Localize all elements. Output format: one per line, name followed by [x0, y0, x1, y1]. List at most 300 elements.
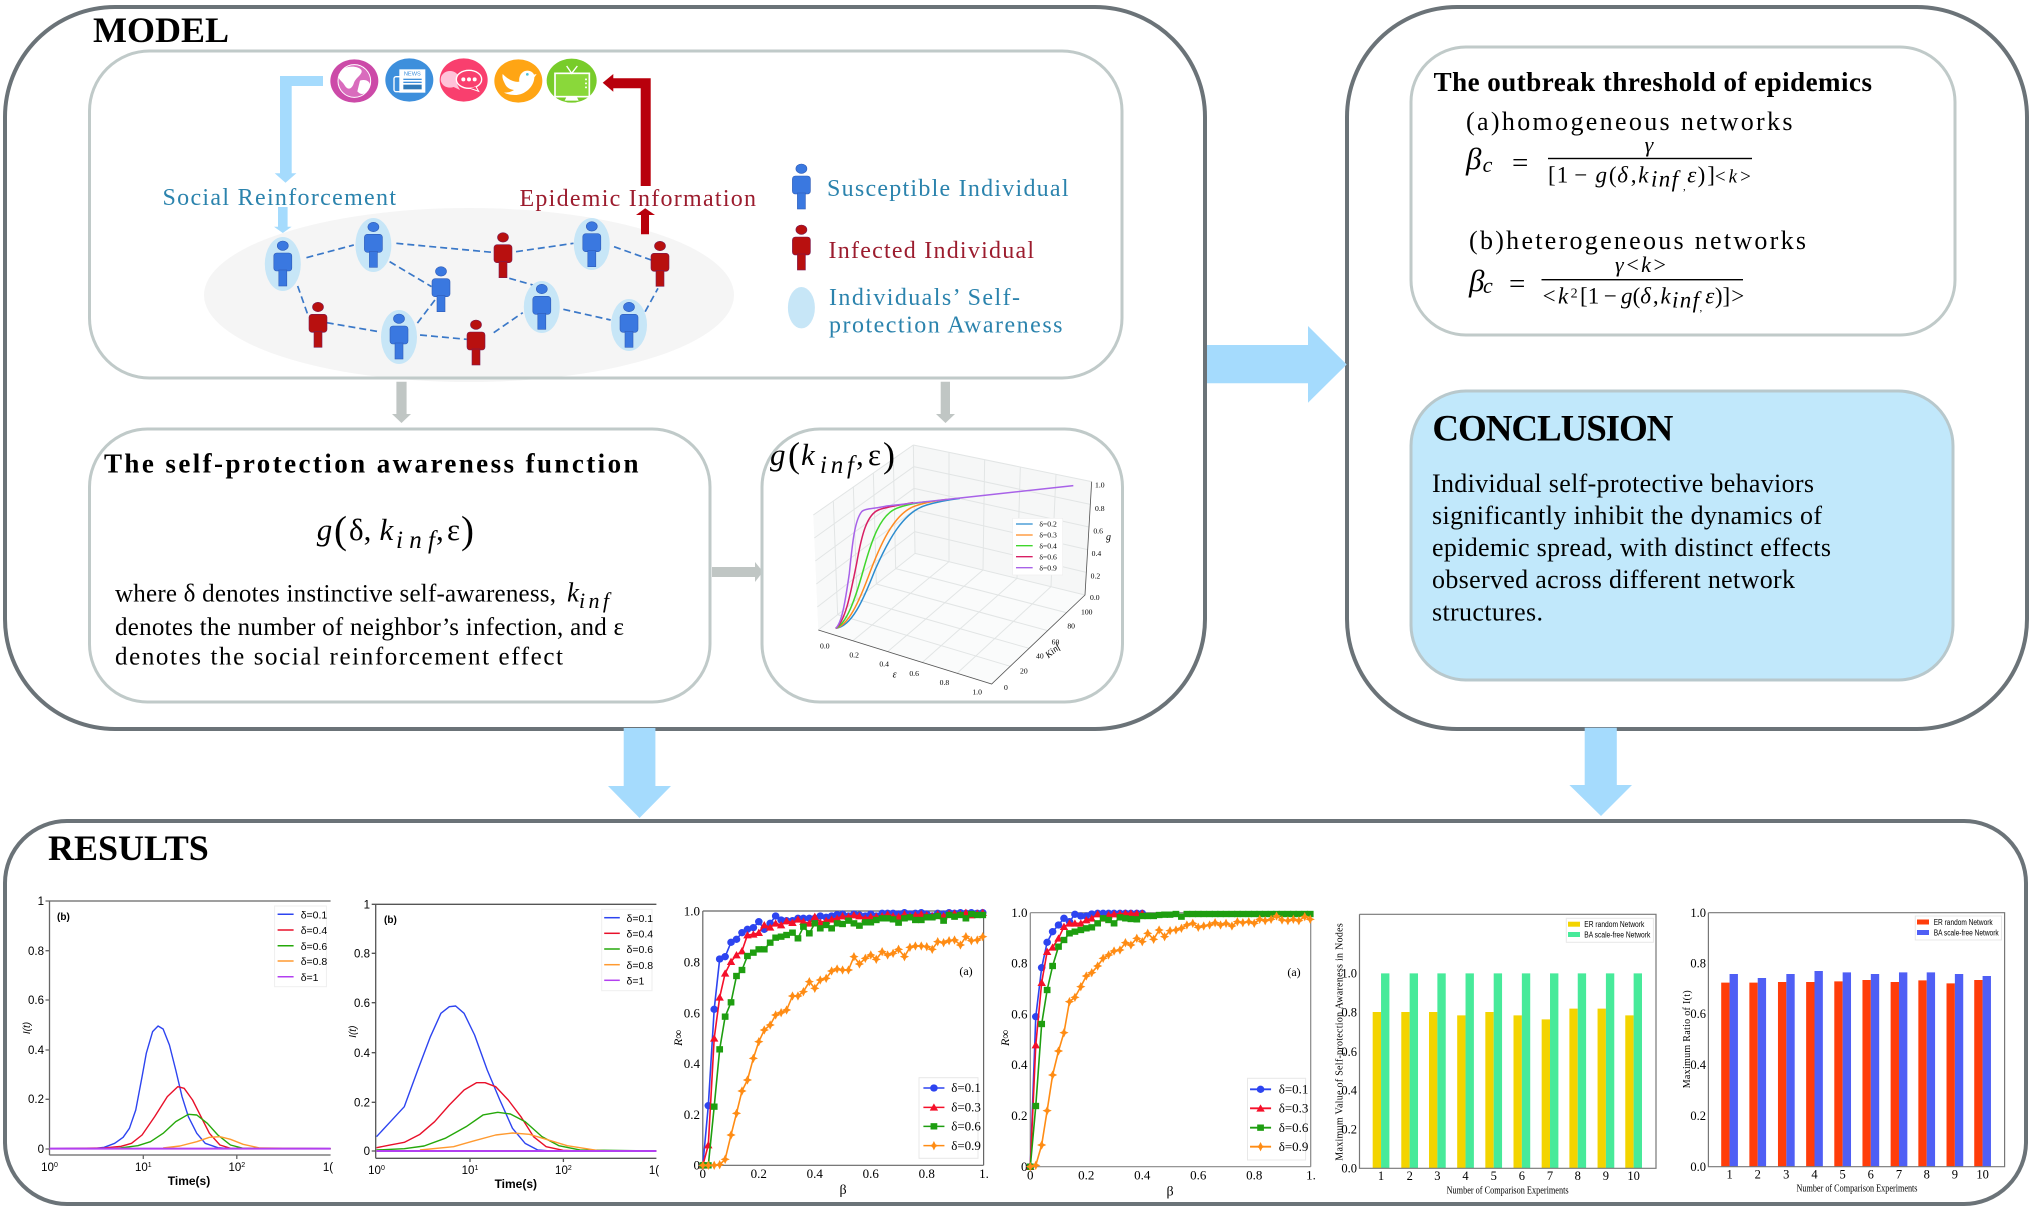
- axis titles: β: [839, 1183, 847, 1198]
- formula: homogeneous threshold: γ: [1645, 132, 1655, 157]
- plot legend: [1013, 518, 1063, 575]
- x tick labels: 0.6: [863, 1166, 879, 1181]
- y tick labels: 0.4: [1690, 1058, 1707, 1072]
- definition text: denotes the social reinforcement effect: [115, 643, 563, 670]
- x tick labels: 5: [1491, 1169, 1497, 1183]
- formula: heterogeneous threshold: ): [1715, 284, 1723, 309]
- conclusion text: structures.: [1432, 598, 1543, 627]
- arrow: conclusion panel to results: [1569, 728, 1632, 816]
- x tick labels: 1(: [649, 1165, 659, 1177]
- formula: g: ε: [447, 512, 460, 547]
- arrow: diagram to function: [392, 382, 411, 423]
- axis titles: (a): [1287, 965, 1301, 979]
- arrow: network to epidemic information: [636, 208, 655, 234]
- formula: heterogeneous threshold: −: [1604, 284, 1617, 309]
- heading: MODEL: MODEL: [93, 10, 229, 50]
- formula: heterogeneous threshold: ]: [1722, 284, 1730, 309]
- formula: g: inf: [396, 527, 438, 554]
- chart: I(t) vs time, first network: [22, 896, 333, 1188]
- network links: [298, 243, 658, 339]
- panel: conclusion: [1411, 391, 1953, 680]
- formula: g: (: [334, 509, 347, 552]
- axis titles: [1334, 923, 1569, 1196]
- x tick labels: 10: [555, 1165, 568, 1177]
- axis titles: Time(s): [168, 1174, 210, 1188]
- plot title: (: [788, 435, 800, 475]
- legend: susceptible individual: Susceptible Individual: [827, 176, 1069, 202]
- y tick labels: 0.4: [1341, 1084, 1358, 1098]
- plot tick labels: 20: [1020, 667, 1028, 676]
- y tick labels: 0.8: [684, 954, 700, 970]
- y tick labels: 0.2: [684, 1107, 700, 1122]
- axes: [372, 904, 656, 1162]
- plot tick labels: 0.2: [849, 651, 859, 660]
- formula: heterogeneous threshold: inf: [1672, 288, 1703, 313]
- axis titles: Number of Comparison Experiments: [1447, 1184, 1569, 1196]
- chart: maximum ratio of I(t) bars: [1682, 906, 2005, 1195]
- panel: RESULTS: [5, 821, 2026, 1204]
- heading: function: The self-protection awareness function: [104, 448, 638, 478]
- panel: outbreak threshold: [1411, 47, 1955, 335]
- y tick labels: 1.0: [1011, 905, 1028, 920]
- curves with markers: [703, 913, 983, 1165]
- plot tick labels: 0.4: [879, 660, 889, 669]
- axis titles: R∞: [998, 1030, 1012, 1047]
- legend: δ=0.9: [1279, 1139, 1308, 1154]
- x tick labels: 2: [1407, 1169, 1413, 1183]
- formula: heterogeneous threshold: [1468, 252, 1744, 314]
- x tick labels: 2: [568, 1165, 572, 1172]
- axis titles: [22, 912, 210, 1188]
- formula: heterogeneous threshold: β: [1468, 263, 1485, 298]
- formula: heterogeneous threshold: k: [1660, 284, 1672, 309]
- axis titles: (b): [57, 912, 70, 923]
- formula: heterogeneous threshold: c: [1483, 273, 1493, 298]
- formula: homogeneous threshold: ,: [1683, 181, 1686, 193]
- y tick labels: 0.6: [684, 1006, 700, 1020]
- y tick labels: 0.2: [1011, 1108, 1028, 1123]
- curves with markers: [1030, 913, 1310, 1167]
- y tick labels: 0.8: [354, 948, 370, 960]
- formula: g: ,: [436, 512, 444, 547]
- x tick labels: 10: [462, 1165, 474, 1177]
- x tick labels: 9: [1952, 1168, 1958, 1182]
- plot tick labels: ε: [893, 669, 897, 680]
- y tick labels: 0.4: [354, 1048, 371, 1060]
- x tick labels: 1: [1726, 1168, 1733, 1182]
- x tick labels: 0.6: [1190, 1168, 1207, 1182]
- conclusion text: significantly inhibit the dynamics of: [1432, 501, 1822, 530]
- formula: homogeneous threshold: [1465, 132, 1752, 193]
- plot title: ,: [856, 437, 864, 472]
- definition text: where δ denotes instinctive self-awareness,: [115, 581, 556, 608]
- y tick labels: 0.6: [28, 995, 44, 1007]
- network background ellipse: [204, 208, 734, 382]
- legend: BA scale-free Network: [1934, 928, 2000, 938]
- y tick labels: 0.4: [1011, 1057, 1028, 1072]
- x tick labels: 4: [1811, 1168, 1818, 1182]
- axes: [1360, 914, 1656, 1168]
- axis titles: Number of Comparison Experiments: [1796, 1183, 1918, 1195]
- x tick labels: 0.2: [751, 1166, 767, 1181]
- y tick labels: 0: [1021, 1159, 1028, 1174]
- formula: heterogeneous threshold: =: [1509, 268, 1525, 300]
- x tick labels: 2: [241, 1162, 245, 1169]
- legend: δ=1: [626, 976, 644, 988]
- formula: heterogeneous threshold: >: [1731, 284, 1744, 309]
- y tick labels: 0.8: [1011, 956, 1028, 970]
- y tick labels: [1011, 905, 1028, 1174]
- legend: δ=0.6: [301, 941, 327, 953]
- x tick labels: 10: [41, 1162, 54, 1174]
- 3d plot g(kinf, epsilon): [813, 445, 1111, 696]
- legend: self-protection awareness: Individuals’ Self-: [829, 285, 1020, 311]
- formula: heterogeneous threshold: ,: [1653, 284, 1659, 309]
- plot legend: δ=0.4: [1039, 541, 1057, 550]
- plot tick labels: 60: [1052, 637, 1059, 646]
- definition text: k: [567, 578, 580, 608]
- y tick labels: 0: [38, 1144, 44, 1156]
- plot legend: δ=0.3: [1039, 531, 1057, 540]
- formula: g: g: [317, 512, 332, 547]
- axis titles: Maximum Value of Self-protection Awareness in Nodes: [1334, 923, 1346, 1161]
- plot tick labels: 0.8: [940, 678, 949, 687]
- formula: homogeneous threshold: k: [1638, 162, 1649, 187]
- icon: newspaper: [385, 58, 433, 102]
- plot tick labels: 40: [1036, 652, 1044, 661]
- formula: heterogeneous threshold: δ: [1640, 284, 1651, 309]
- definition text: [115, 578, 624, 670]
- y tick labels: 0.0: [1341, 1162, 1357, 1176]
- formula: homogeneous threshold: [: [1548, 162, 1556, 187]
- plot tick labels: g: [1106, 532, 1111, 543]
- legend: [602, 909, 653, 991]
- plot legend: δ=0.6: [1039, 552, 1057, 561]
- x tick labels: [1378, 1169, 1640, 1183]
- y tick labels: [1690, 906, 1707, 1174]
- icon: chat bubbles: [440, 58, 488, 102]
- y tick labels: 0.8: [1690, 956, 1706, 970]
- x tick labels: 9: [1603, 1169, 1609, 1183]
- formula: heterogeneous threshold: <: [1543, 284, 1556, 309]
- y tick labels: [28, 896, 45, 1156]
- plot tick labels: 0.6: [909, 669, 919, 678]
- axis titles: β: [1166, 1184, 1174, 1200]
- formula: homogeneous threshold: β: [1465, 141, 1482, 176]
- axis titles: [348, 915, 537, 1191]
- legend: [919, 1078, 981, 1158]
- y tick labels: 0.2: [28, 1094, 44, 1106]
- conclusion text: epidemic spread, with distinct effects: [1432, 533, 1831, 562]
- formula: heterogeneous threshold: 1: [1588, 284, 1599, 309]
- x tick labels: 7: [1547, 1169, 1553, 1183]
- formula: heterogeneous threshold: (: [1633, 284, 1640, 309]
- plot title: k: [801, 437, 816, 472]
- plot tick labels: 0.8: [1095, 504, 1105, 513]
- label: Social Reinforcement: Social Reinforcement: [162, 185, 396, 211]
- bars: [1721, 971, 1991, 1167]
- arrow: model to results: [608, 728, 671, 818]
- x tick labels: 0: [700, 1166, 706, 1181]
- arrow: diagram to surface plot: [936, 382, 955, 423]
- y tick labels: 1.0: [684, 904, 700, 918]
- plot tick labels: [820, 481, 1111, 696]
- icon: newspaper: NEWS: [404, 71, 421, 77]
- axis titles: (a): [959, 964, 973, 978]
- legend: δ=0.9: [951, 1138, 981, 1153]
- x tick labels: 7: [1896, 1168, 1902, 1182]
- label: Epidemic Information: Epidemic Information: [520, 186, 756, 212]
- axis titles: I(t): [22, 1022, 33, 1034]
- legend: infected individual: Infected Individual: [828, 238, 1034, 264]
- x tick labels: 0: [381, 1165, 385, 1172]
- arrow: media to social reinforcement: [275, 76, 323, 183]
- curves: [49, 1026, 331, 1149]
- legend: δ=1: [301, 972, 319, 984]
- x tick labels: [41, 1162, 333, 1174]
- x tick labels: 6: [1868, 1168, 1874, 1182]
- formula: g: ): [461, 509, 474, 552]
- plot tick labels: 0.0: [820, 642, 830, 651]
- plot tick labels: Kinf: [1042, 641, 1064, 661]
- legend: δ=0.8: [626, 960, 653, 972]
- plot title: ε: [868, 437, 881, 472]
- arrow: function to surface plot: [712, 562, 763, 582]
- panel: MODEL: [5, 7, 1205, 729]
- legend: [1566, 918, 1653, 942]
- x tick labels: 10: [1976, 1168, 1989, 1182]
- subheading: homogeneous networks: (a)homogeneous networks: [1466, 107, 1792, 136]
- arrow: model to conclusion panel: [1207, 326, 1347, 403]
- plot legend: δ=0.2: [1039, 520, 1057, 529]
- formula: g: δ,: [349, 512, 371, 547]
- formula: heterogeneous threshold: g: [1621, 284, 1632, 309]
- formula: heterogeneous threshold: γ<k>: [1615, 252, 1667, 277]
- legend: δ=0.1: [951, 1080, 981, 1095]
- bars: [1373, 973, 1642, 1168]
- axis titles: R∞: [671, 1030, 685, 1047]
- legend: [1248, 1078, 1309, 1160]
- formula: heterogeneous threshold: 2: [1571, 287, 1578, 302]
- plot tick labels: 0: [1004, 683, 1008, 692]
- plot tick labels: 0.2: [1091, 571, 1100, 580]
- icon: television: [547, 59, 597, 103]
- definition text: denotes the number of neighbor’s infection, and ε: [115, 614, 624, 641]
- y tick labels: 0.4: [28, 1045, 45, 1057]
- x tick labels: 0: [54, 1162, 58, 1169]
- heading: conclusion: CONCLUSION: [1432, 408, 1674, 450]
- axis titles: [1682, 990, 1918, 1195]
- formula: heterogeneous threshold: ,: [1700, 302, 1702, 314]
- x tick labels: 1: [148, 1162, 152, 1169]
- y tick labels: 0: [694, 1158, 700, 1172]
- conclusion text: [1432, 469, 1831, 627]
- x tick labels: 0.2: [1078, 1168, 1094, 1182]
- y tick labels: 0.6: [354, 998, 370, 1010]
- conclusion text: Individual self-protective behaviors: [1432, 469, 1814, 498]
- chart: R-infinity vs beta, second network: [998, 905, 1316, 1200]
- formula: homogeneous threshold: −: [1574, 162, 1587, 187]
- chart: maximum self-protection awareness bars: [1334, 914, 1656, 1196]
- axes: [1708, 913, 2005, 1167]
- legend: δ=0.1: [1279, 1082, 1308, 1096]
- plot tick labels: 0.0: [1090, 593, 1100, 602]
- axes: [1030, 913, 1311, 1167]
- arrow: social reinforcement to network: [274, 207, 292, 233]
- subheading: heterogeneous networks: (b)heterogeneous networks: [1469, 226, 1806, 255]
- panel: self-protection awareness function: [90, 429, 710, 702]
- axis titles: I(t): [348, 1026, 359, 1038]
- legend: δ=0.6: [1279, 1120, 1309, 1135]
- legend: δ=0.6: [951, 1118, 981, 1134]
- x tick labels: 1: [474, 1165, 478, 1172]
- y tick labels: [354, 900, 371, 1158]
- axis titles: Maximum Ratio of I(t): [1682, 990, 1693, 1088]
- y tick labels: 0.6: [1341, 1045, 1357, 1059]
- axis titles: (b): [384, 915, 397, 926]
- y tick labels: 0.2: [1690, 1109, 1706, 1123]
- x tick labels: [368, 1165, 659, 1177]
- y tick labels: 0.6: [1690, 1007, 1706, 1021]
- network individuals: [274, 222, 669, 365]
- x tick labels: 1: [1378, 1169, 1384, 1183]
- x tick labels: 10: [228, 1162, 241, 1174]
- x tick labels: 0.8: [919, 1166, 935, 1181]
- axis titles: Time(s): [495, 1177, 537, 1191]
- plot title: inf: [820, 452, 857, 479]
- legend: δ=0.3: [1279, 1100, 1308, 1116]
- y tick labels: 0.0: [1690, 1160, 1706, 1174]
- legend: BA scale-free Network: [1584, 930, 1651, 940]
- formula: homogeneous threshold: ε: [1687, 162, 1697, 187]
- y tick labels: 0: [364, 1146, 370, 1158]
- x tick labels: 4: [1462, 1169, 1469, 1183]
- formula: heterogeneous threshold: k: [1558, 284, 1569, 309]
- formula: homogeneous threshold: (: [1609, 162, 1617, 187]
- plot title: g: [770, 437, 786, 472]
- formula: g: k: [380, 512, 394, 547]
- formula: heterogeneous threshold: ε: [1705, 284, 1715, 309]
- formula: homogeneous threshold: ]: [1707, 162, 1715, 187]
- x tick labels: 0.4: [807, 1166, 823, 1181]
- axes: [703, 911, 984, 1165]
- legend: ER random Network: [1934, 918, 1994, 927]
- plot legend: δ=0.9: [1039, 563, 1057, 572]
- heading: outbreak threshold: The outbreak threshold of epidemics: [1434, 67, 1872, 97]
- surface curves: [836, 486, 1073, 628]
- legend: ER random Network: [1584, 920, 1645, 929]
- x tick labels: 3: [1783, 1168, 1789, 1182]
- y tick labels: 0.2: [354, 1098, 370, 1110]
- plot tick labels: 80: [1067, 621, 1075, 630]
- legend: [1915, 916, 2002, 940]
- icon: globe: [330, 59, 378, 103]
- heading: RESULTS: RESULTS: [48, 828, 209, 868]
- x tick labels: [1027, 1168, 1316, 1182]
- plot tick labels: 1.0: [972, 687, 982, 696]
- legend: self-protection awareness: protection Awareness: [829, 312, 1062, 338]
- legend: δ=0.6: [626, 944, 653, 956]
- y tick labels: 1.0: [1690, 906, 1706, 920]
- formula: homogeneous threshold: inf: [1651, 166, 1682, 191]
- x tick labels: 1.: [979, 1166, 989, 1181]
- plot tick labels: 100: [1081, 607, 1093, 616]
- panel: threshold and conclusion: [1347, 7, 2027, 729]
- x tick labels: 1(: [323, 1162, 333, 1174]
- arrow: epidemic information to media: [603, 74, 651, 186]
- y tick labels: 1.0: [1341, 966, 1357, 980]
- legend: δ=0.4: [301, 925, 327, 937]
- x tick labels: 0: [1027, 1168, 1034, 1182]
- y tick labels: 0.8: [28, 946, 44, 958]
- formula: homogeneous threshold: 1: [1557, 162, 1568, 187]
- panel: network model diagram: [90, 51, 1122, 382]
- formula: homogeneous threshold: <k>: [1715, 166, 1751, 187]
- x tick labels: 3: [1434, 1169, 1441, 1183]
- axes: [46, 901, 331, 1159]
- panel: surface plot: [762, 429, 1122, 702]
- x tick labels: 6: [1519, 1169, 1525, 1183]
- x tick labels: 8: [1575, 1169, 1581, 1183]
- x tick labels: 0.4: [1134, 1168, 1151, 1182]
- curves: [377, 1006, 656, 1151]
- formula: homogeneous threshold: ): [1698, 162, 1705, 187]
- y tick labels: [684, 904, 700, 1172]
- x tick labels: 10: [368, 1165, 381, 1177]
- plot title: ): [883, 435, 895, 475]
- legend: [275, 906, 327, 987]
- legend: δ=0.3: [951, 1100, 981, 1114]
- chart: R-infinity vs beta, first network: [671, 904, 989, 1198]
- formula: homogeneous threshold: δ: [1617, 162, 1628, 187]
- legend: susceptible individual: [792, 164, 1069, 209]
- formula: homogeneous threshold: ,: [1631, 162, 1636, 187]
- formula: homogeneous threshold: g: [1596, 162, 1607, 187]
- conclusion text: observed across different network: [1432, 565, 1795, 594]
- y tick labels: [1341, 966, 1358, 1176]
- y tick labels: 0.4: [684, 1056, 700, 1071]
- x tick labels: [1726, 1168, 1989, 1182]
- x tick labels: [700, 1166, 989, 1181]
- x tick labels: 5: [1839, 1168, 1846, 1182]
- y tick labels: 1: [364, 900, 370, 912]
- awareness halos: [265, 218, 647, 364]
- chart: I(t) vs time, second network: [348, 900, 659, 1191]
- x tick labels: 8: [1924, 1168, 1930, 1182]
- plot tick labels: 0.6: [1093, 527, 1103, 536]
- legend: self-protection awareness: [788, 285, 1062, 338]
- legend: δ=0.4: [626, 928, 653, 940]
- y tick labels: 0.6: [1011, 1006, 1028, 1022]
- formula: heterogeneous threshold: [: [1580, 284, 1588, 309]
- legend: δ=0.1: [301, 910, 327, 922]
- icon: bird: [494, 59, 542, 103]
- definition text: inf: [579, 588, 612, 613]
- axis titles: [671, 964, 973, 1198]
- x tick labels: 10: [135, 1162, 148, 1174]
- plot tick labels: 1.0: [1095, 481, 1105, 490]
- x tick labels: 0.8: [1246, 1168, 1262, 1182]
- x tick labels: 1.: [1306, 1168, 1316, 1182]
- y tick labels: 0.2: [1341, 1122, 1357, 1136]
- formula: homogeneous threshold: c: [1483, 152, 1493, 177]
- x tick labels: 2: [1755, 1168, 1761, 1182]
- legend: δ=0.1: [626, 913, 653, 925]
- y tick labels: 0.8: [1341, 1006, 1357, 1020]
- axis titles: [998, 965, 1301, 1200]
- legend: infected individual: [792, 225, 1034, 270]
- x tick labels: 10: [1627, 1169, 1640, 1183]
